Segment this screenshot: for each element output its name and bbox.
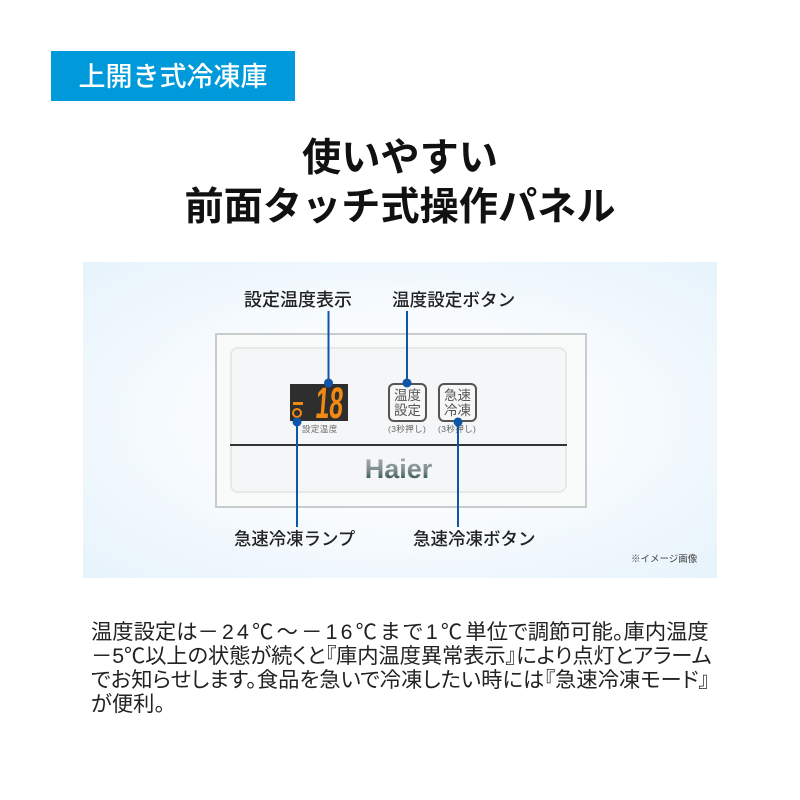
display caption: 設定温度: [302, 424, 338, 434]
description text: －5℃以上の状態が続くと『庫内温度異常表示』により点灯とアラーム: [91, 644, 711, 668]
title: 前面タッチ式操作パネル: [184, 186, 616, 229]
divider: [230, 444, 567, 446]
button: quick freeze: [438, 383, 477, 422]
button caption: (3秒押し): [388, 424, 426, 434]
description text: [91, 620, 711, 716]
display: set temperature: [290, 384, 348, 421]
button: temperature setting: [388, 383, 427, 422]
image note: ※イメージ画像: [631, 554, 697, 565]
callout lines: [292, 311, 462, 527]
title: [184, 137, 616, 229]
panel: control panel diagram: [83, 262, 717, 578]
inner panel face: [230, 347, 567, 493]
panel photo: [215, 333, 587, 508]
button caption: (3秒押し): [438, 424, 476, 434]
description text: が便利。: [91, 692, 165, 716]
description text: 温度設定は－24℃～－16℃まで1℃単位で調節可能。庫内温度: [91, 620, 709, 644]
logo: Haier: Haier: [365, 454, 432, 484]
button: quick freeze: 急速: [444, 388, 471, 403]
category tag: 上開き式冷凍庫: [78, 62, 268, 92]
description text: でお知らせします。食品を急いで冷凍したい時には『急速冷凍モード』: [91, 668, 709, 692]
label: set temperature display: 設定温度表示: [244, 290, 352, 310]
label: temperature setting button: 温度設定ボタン: [392, 290, 515, 310]
button: quick freeze: 冷凍: [444, 403, 471, 418]
display minus: [293, 402, 303, 405]
label: quick freeze button: 急速冷凍ボタン: [413, 529, 536, 549]
display lamp icon: [292, 408, 302, 418]
label: quick freeze lamp: 急速冷凍ランプ: [234, 529, 355, 549]
button: temperature setting: 温度: [394, 388, 421, 403]
category tag: [51, 51, 295, 101]
title: 使いやすい: [302, 137, 498, 180]
button: temperature setting: 設定: [394, 403, 421, 418]
